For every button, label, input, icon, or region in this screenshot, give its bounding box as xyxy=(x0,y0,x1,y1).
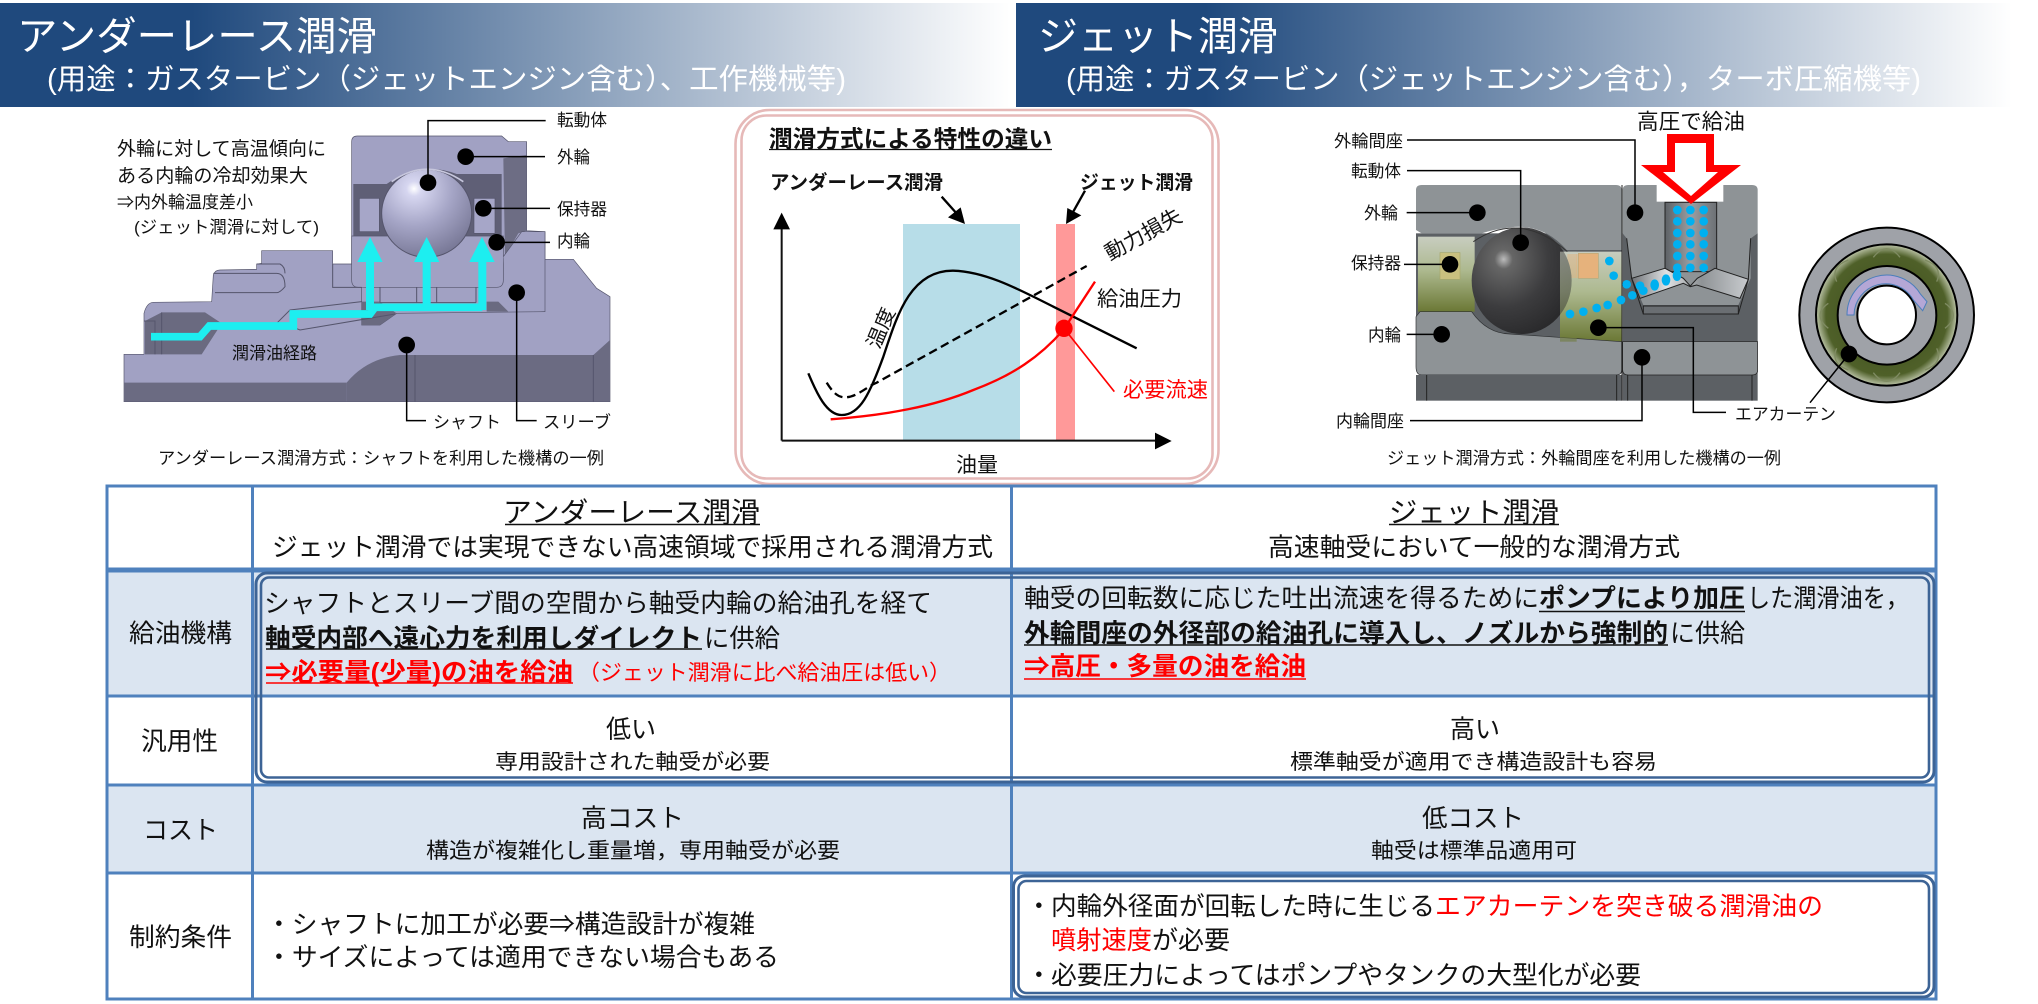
diagram: under-race bearing mechanism: 潤滑油経路 xyxy=(232,344,317,363)
diagram: under-race bearing mechanism: 内輪 xyxy=(557,232,590,251)
table header: jet: 高速軸受において一般的な潤滑方式 xyxy=(1268,533,1680,562)
diagram: under-race bearing mechanism: 保持器 xyxy=(557,200,607,219)
text block: under-race cooling effect note xyxy=(117,138,326,237)
arrow: red high-pressure feed xyxy=(1641,134,1741,204)
supply mechanism: jet: ポンプにより加圧 xyxy=(1539,584,1745,613)
supply mechanism: under-race: に供給 xyxy=(704,624,780,653)
diagram: jet lubrication bearing mechanism: 転動体 xyxy=(1351,162,1401,181)
row labels xyxy=(129,619,232,952)
supply mechanism: jet: に供給 xyxy=(1670,619,1745,648)
supply mechanism: under-race: 軸受内部へ遠心力を利用しダイレクト xyxy=(265,623,702,653)
header: under-race lubrication xyxy=(0,3,1010,107)
versatility: under-race: 低い xyxy=(606,715,656,744)
cost: under-race: 高コスト xyxy=(581,804,684,833)
versatility: under-race: 専用設計された軸受が必要 xyxy=(495,750,770,774)
table grid xyxy=(107,486,1936,999)
label: high-pressure supply: 高圧で給油 xyxy=(1637,110,1745,134)
cost: under-race xyxy=(426,804,840,863)
diagram: jet lubrication bearing mechanism: 保持器 xyxy=(1351,254,1401,273)
diagram: jet lubrication bearing mechanism xyxy=(1334,132,1836,431)
diagram: under-race bearing mechanism: 転動体 xyxy=(557,111,607,130)
row labels: 制約条件 xyxy=(129,923,232,952)
text block: under-race cooling effect note: (ジェット潤滑に対して) xyxy=(134,218,319,237)
text block: under-race cooling effect note: 外輪に対して高温傾向に xyxy=(117,138,326,160)
constraints: jet: ・ xyxy=(1026,962,1052,990)
cost: under-race: 構造が複雑化し重量増，専用軸受が必要 xyxy=(426,838,840,863)
row labels: 汎用性 xyxy=(141,727,218,756)
cost: jet: 軸受は標準品適用可 xyxy=(1371,838,1577,863)
supply mechanism: under-race: （ジェット潤滑に比べ給油圧は低い） xyxy=(578,661,951,685)
supply mechanism: jet: 軸受の回転数に応じた吐出流速を得るために xyxy=(1024,584,1539,613)
diagram: under-race bearing mechanism xyxy=(124,111,611,432)
diagram: jet lubrication bearing mechanism: エアカーテン xyxy=(1735,405,1836,424)
text block: under-race cooling effect note: ある内輪の冷却効果大 xyxy=(117,165,308,187)
diagram: jet lubrication bearing mechanism: 内輪 xyxy=(1368,326,1401,345)
chart labels: 必要流速 xyxy=(1123,379,1208,402)
highlight frame: supply and versatility rows xyxy=(256,573,1934,782)
row labels: 給油機構 xyxy=(129,619,232,648)
text block: under-race cooling effect note: ⇒内外輪温度差小 xyxy=(117,193,253,212)
constraints: jet: 必要圧力によってはポンプやタンクの大型化が必要 xyxy=(1051,961,1641,990)
chart labels: 動力損失 xyxy=(1101,205,1186,265)
constraints: jet: が必要 xyxy=(1152,926,1230,955)
supply mechanism: jet: 外輪間座の外径部の給油孔に導入し、ノズルから強制的 xyxy=(1024,618,1668,648)
header: jet lubrication: ジェット潤滑 xyxy=(1038,15,1278,59)
supply mechanism: jet: した潤滑油を， xyxy=(1747,584,1909,613)
chart labels: 給油圧力 xyxy=(1097,288,1182,311)
caption: under-race mechanism: アンダーレース潤滑方式：シャフトを利用した機構の一例 xyxy=(158,449,604,468)
row labels: コスト xyxy=(143,817,218,845)
panel: characteristics chart xyxy=(736,110,1218,484)
chart labels: アンダーレース潤滑 xyxy=(770,171,943,194)
chart labels xyxy=(770,171,1208,477)
cost: jet: 低コスト xyxy=(1422,804,1524,833)
blue oil droplets xyxy=(1566,206,1708,318)
versatility: jet xyxy=(1290,715,1657,774)
chart labels: 油量 xyxy=(956,454,998,477)
chart labels: ジェット潤滑 xyxy=(1080,172,1193,194)
caption: jet mechanism: ジェット潤滑方式：外輪間座を利用した機構の一例 xyxy=(1387,449,1781,468)
constraints: jet xyxy=(1026,892,1823,990)
table header: under-race: ジェット潤滑では実現できない高速領域で採用される潤滑方式 xyxy=(272,533,993,562)
diagram: under-race bearing mechanism: 外輪 xyxy=(557,148,590,167)
table header: under-race: アンダーレース潤滑 xyxy=(503,497,760,528)
versatility: jet: 高い xyxy=(1450,715,1500,744)
header: jet lubrication: (用途：ガスタービン（ジェットエンジン含む），ターボ圧縮機等) xyxy=(1066,63,1921,96)
cyan oil flow arrows xyxy=(151,237,495,337)
diagram: under-race bearing mechanism: シャフト xyxy=(433,413,501,432)
supply mechanism: under-race xyxy=(264,589,951,687)
constraints: under-race xyxy=(266,910,779,972)
line chart xyxy=(773,191,1172,449)
header: jet lubrication xyxy=(1016,3,2012,107)
constraints: under-race: ・シャフトに加工が必要⇒構造設計が複雑 xyxy=(266,910,755,939)
callout leader lines xyxy=(1404,140,1726,421)
versatility: jet: 標準軸受が適用でき構造設計も容易 xyxy=(1290,750,1657,774)
constraints: under-race: ・サイズによっては適用できない場合もある xyxy=(266,943,779,972)
supply mechanism: jet: ⇒高圧・多量の油を給油 xyxy=(1024,652,1306,681)
highlight frame: jet constraints cell xyxy=(1014,876,1934,997)
chart title: 潤滑方式による特性の違い xyxy=(769,126,1052,152)
header: under-race lubrication: (用途：ガスタービン（ジェットエンジン含む）、工作機械等) xyxy=(47,63,846,96)
cost: jet xyxy=(1371,804,1577,863)
diagram: jet lubrication bearing mechanism: 内輪間座 xyxy=(1336,412,1404,431)
icon: air curtain bearing end view xyxy=(1799,228,1974,403)
chart labels: 温度 xyxy=(862,304,900,352)
constraints: jet: 噴射速度 xyxy=(1051,926,1152,955)
supply mechanism: under-race: シャフトとスリーブ間の空間から軸受内輪の給油孔を経て xyxy=(264,589,932,618)
comparison table xyxy=(107,486,1936,999)
constraints: jet: ・ xyxy=(1026,893,1052,921)
diagram: jet lubrication bearing mechanism: 外輪間座 xyxy=(1334,132,1403,151)
versatility: under-race xyxy=(495,715,770,774)
supply mechanism: jet xyxy=(1024,584,1909,681)
table header: jet: ジェット潤滑 xyxy=(1389,497,1559,528)
table header: jet xyxy=(1268,497,1680,562)
header: under-race lubrication: アンダーレース潤滑 xyxy=(17,15,377,59)
diagram: under-race bearing mechanism: スリーブ xyxy=(543,412,611,432)
supply mechanism: under-race: ⇒必要量(少量)の油を給油 xyxy=(265,658,573,687)
diagram: jet lubrication bearing mechanism: 外輪 xyxy=(1364,204,1398,223)
callout leader lines xyxy=(398,121,550,421)
table header: under-race xyxy=(272,497,993,562)
constraints: jet: 内輪外径面が回転した時に生じる xyxy=(1051,892,1435,921)
constraints: jet: エアカーテンを突き破る潤滑油の xyxy=(1435,892,1823,921)
